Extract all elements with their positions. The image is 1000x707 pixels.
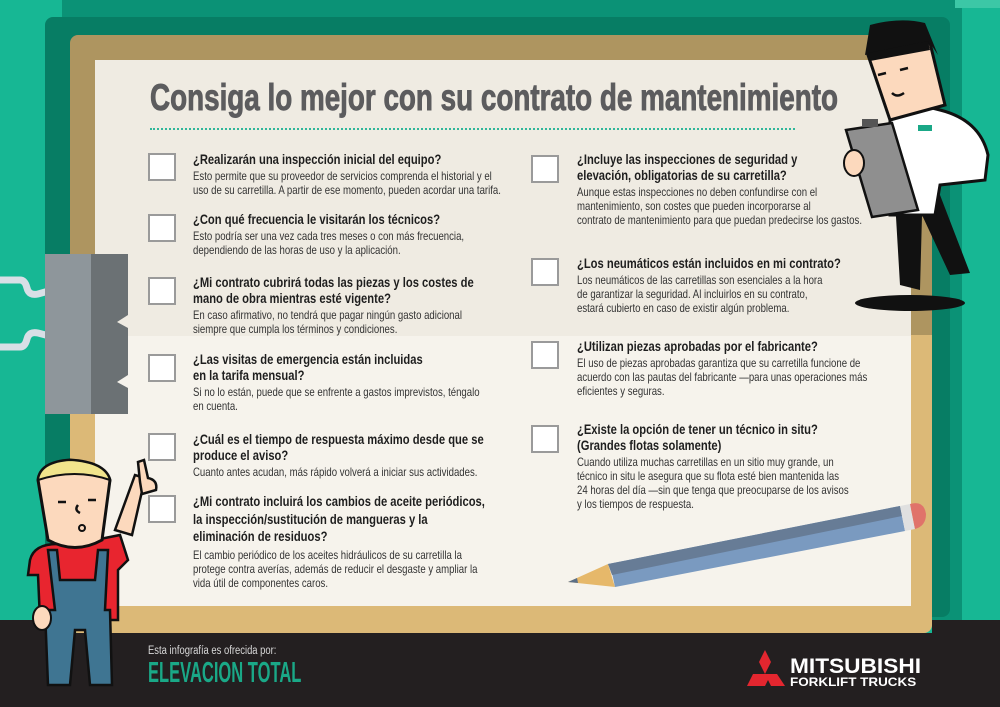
item 4: en cuenta. — [193, 399, 238, 413]
clipboard board — [70, 35, 932, 633]
character: worker pointing — [26, 458, 158, 686]
item 4: ¿Las visitas de emergencia están incluidas — [193, 351, 423, 367]
item 8: de garantizar la seguridad. Al incluirlos en su contrato, — [577, 287, 808, 301]
item 8: estará cubierto en caso de existir algún problema. — [577, 301, 789, 315]
item 1: ¿Realizarán una inspección inicial del equipo? — [193, 151, 441, 167]
item 10: Cuando utiliza muchas carretillas en un sitio muy grande, un — [577, 455, 834, 469]
item 6: ¿Mi contrato incluirá los cambios de aceite periódicos, — [193, 493, 485, 509]
item 5: Cuanto antes acudan, más rápido volverá a iniciar sus actividades. — [193, 465, 477, 479]
item 7: elevación, obligatorias de su carretilla? — [577, 167, 787, 183]
item 3: En caso afirmativo, no tendrá que pagar ningún gasto adicional — [193, 308, 462, 322]
item 5 — [193, 431, 484, 479]
logo: Mitsubishi: FORKLIFT TRUCKS — [790, 675, 916, 689]
item 8: Los neumáticos de las carretillas son esenciales a la hora — [577, 273, 822, 287]
item 9: eficientes y seguras. — [577, 384, 665, 398]
item 2 — [193, 211, 464, 257]
item 7: mantenimiento, son costes que pueden incorporarse al — [577, 199, 811, 213]
item 5: ¿Cuál es el tiempo de respuesta máximo desde que se — [193, 431, 484, 447]
item 6: protege contra averías, además de reducir el desgaste y ampliar la — [193, 562, 477, 576]
item 2: Esto podría ser una vez cada tres meses o con más frecuencia, — [193, 229, 464, 243]
item 4 — [193, 351, 480, 413]
item 6: eliminación de residuos? — [193, 528, 327, 544]
item 8 — [577, 255, 841, 315]
item 7: Aunque estas inspecciones no deben confundirse con el — [577, 185, 817, 199]
item 7: ¿Incluye las inspecciones de seguridad y — [577, 151, 797, 167]
item 10: (Grandes flotas solamente) — [577, 437, 721, 453]
right column items — [531, 155, 559, 183]
item 3: siempre que cumpla los términos y condiciones. — [193, 322, 397, 336]
footer — [0, 633, 1000, 707]
item 2: dependiendo de las horas de uso y la aplicación. — [193, 243, 401, 257]
item 4: Si no lo están, puede que se enfrente a gastos imprevistos, téngalo — [193, 385, 480, 399]
item 9: acuerdo con las pautas del fabricante —para unas operaciones más — [577, 370, 867, 384]
background panel — [62, 0, 962, 625]
item 10: ¿Existe la opción de tener un técnico in situ? — [577, 421, 818, 437]
footer: sponsor text: ELEVACION TOTAL — [148, 657, 301, 689]
item 2: ¿Con qué frecuencia le visitarán los técnicos? — [193, 211, 440, 227]
item 4: en la tarifa mensual? — [193, 367, 304, 383]
item 7: contrato de mantenimiento para que puedan predecirse los gastos. — [577, 213, 862, 227]
item 9 — [577, 338, 867, 398]
dashed divider — [150, 128, 795, 130]
item 3: mano de obra mientras esté vigente? — [193, 290, 391, 306]
item 3: ¿Mi contrato cubrirá todas las piezas y los costes de — [193, 274, 474, 290]
footer: sponsor text: Esta infografía es ofrecida por: — [148, 645, 276, 657]
logo: Mitsubishi — [747, 650, 921, 689]
item 6: vida útil de componentes caros. — [193, 576, 328, 590]
item 3 — [193, 274, 474, 336]
item 6 — [193, 493, 485, 590]
item 6: El cambio periódico de los aceites hidráulicos de su carretilla la — [193, 548, 462, 562]
item 9: ¿Utilizan piezas aprobadas por el fabricante? — [577, 338, 818, 354]
clip icon — [0, 254, 128, 414]
item 8: ¿Los neumáticos están incluidos en mi contrato? — [577, 255, 841, 271]
item 6: la inspección/sustitución de mangueras y la — [193, 510, 428, 526]
item 1: uso de su carretilla. A partir de ese momento, pueden acordar una tarifa. — [193, 183, 501, 197]
paper — [95, 60, 911, 606]
item 10: y los tiempos de respuesta. — [577, 497, 694, 511]
item 10: 24 horas del día —sin que tenga que preocuparse de los avisos — [577, 483, 849, 497]
item 5: produce el aviso? — [193, 447, 288, 463]
item 1 — [193, 151, 501, 197]
item 9: El uso de piezas aprobadas garantiza que su carretilla funcione de — [577, 356, 860, 370]
item 10: técnico in situ le asegura que su flota esté bien mantenida las — [577, 469, 839, 483]
item 10 — [577, 421, 849, 511]
logo: Mitsubishi: MITSUBISHI — [790, 655, 921, 678]
item 1: Esto permite que su proveedor de servicios comprenda el historial y el — [193, 169, 492, 183]
item 7 — [577, 151, 862, 227]
character: inspector with clipboard — [843, 20, 990, 311]
left column items — [148, 153, 176, 181]
icon: pencil — [568, 503, 926, 587]
